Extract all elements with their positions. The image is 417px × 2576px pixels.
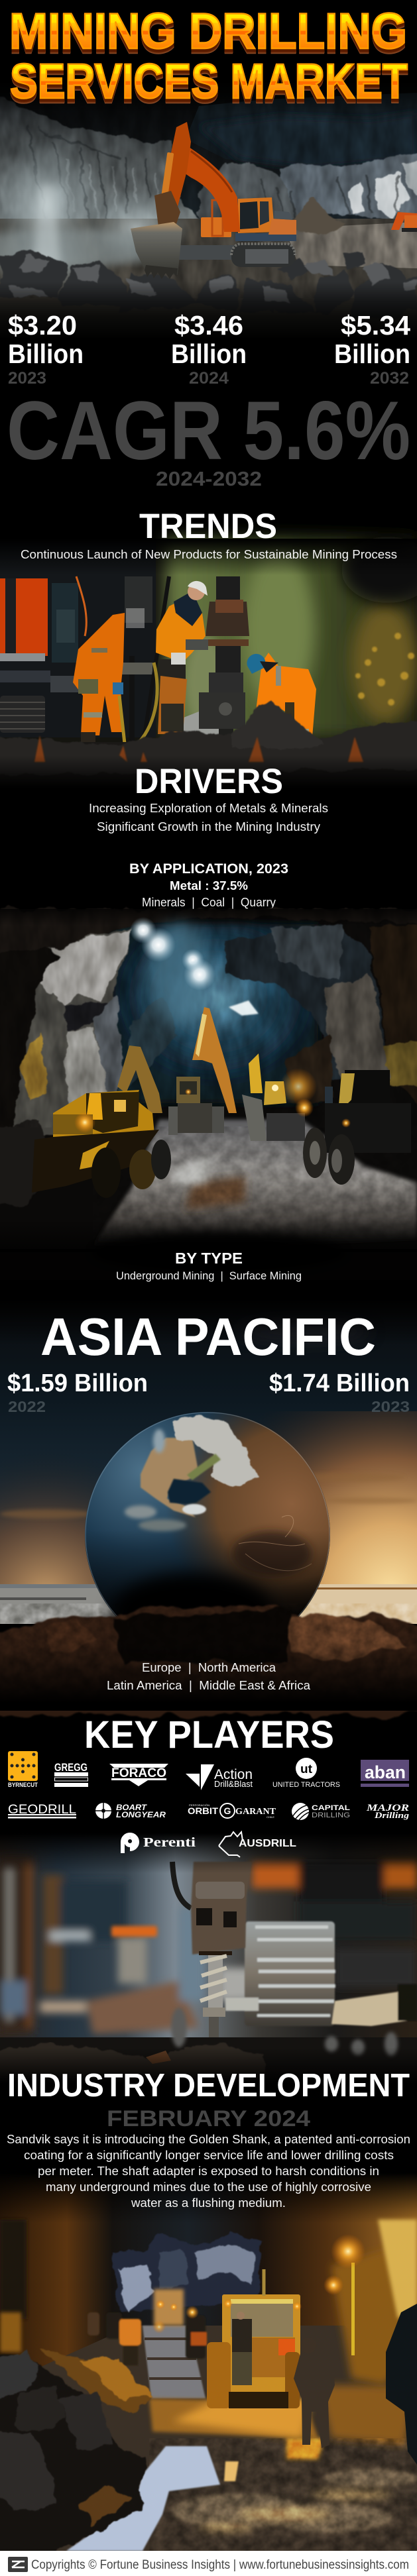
logo: Ausdrill	[219, 1832, 296, 1857]
logo: Gregg	[54, 1761, 88, 1787]
stat: 2023: $3.20	[8, 310, 77, 341]
heading: drivers: DRIVERS	[135, 762, 283, 801]
development text: Sandvik says it is introducing the Golden Shank, a patented anti-corrosion	[7, 2133, 410, 2146]
development text: coating for a significantly longer service life and lower drilling costs	[24, 2149, 394, 2162]
logo: Byrnecut	[8, 1751, 38, 1788]
floor	[93, 1120, 417, 1246]
segment: by application	[129, 861, 288, 909]
drill rig column	[119, 576, 249, 752]
development date: FEBRUARY 2024	[107, 2106, 310, 2131]
logo: Orbit Garant: ORBIT	[188, 1805, 218, 1816]
land	[141, 1438, 199, 1517]
standing worker	[294, 2337, 335, 2448]
logo: Major Drilling	[366, 1803, 410, 1820]
logo: Major Drilling: MAJOR	[366, 1803, 409, 1813]
image: underground mine tunnel	[0, 909, 417, 1280]
icon: Fortune Business Insights logo	[8, 2557, 28, 2572]
stat: 2032: Billion	[334, 339, 410, 369]
logo: United Tractors: ut	[300, 1762, 312, 1776]
ground	[0, 2326, 417, 2551]
other regions	[107, 1661, 311, 1692]
heading: trends: TRENDS	[139, 507, 277, 546]
background excavators	[117, 1007, 317, 1141]
stat: 2032: $5.34	[341, 310, 410, 341]
stat: 2024: Billion	[171, 339, 247, 369]
dark loader	[303, 1070, 411, 1185]
segment: by application: Minerals | Coal | Quarry	[142, 896, 276, 909]
development text	[7, 2133, 410, 2210]
CAGR period: 2024-2032	[156, 467, 262, 490]
foreground worker	[386, 2304, 417, 2465]
logo: Capital Drilling: CAPITAL	[312, 1804, 350, 1812]
logo: Aban: aban	[365, 1762, 406, 1782]
stat: 2032: 2032	[370, 369, 409, 388]
logo: Perenti: Perenti	[143, 1835, 196, 1850]
dirt mound	[0, 1603, 417, 1716]
logo: Ausdrill: AUSDRILL	[239, 1838, 296, 1849]
segment: by type: BY TYPE	[175, 1250, 243, 1267]
worker left	[73, 608, 145, 755]
image: globe at sunset	[0, 1299, 417, 1716]
logo: Boart Longyear	[95, 1803, 166, 1819]
people in distance	[88, 2312, 207, 2365]
logo: Capital Drilling	[292, 1803, 350, 1820]
logo: Gregg: GREGG	[54, 1761, 88, 1774]
yellow loader	[32, 1090, 171, 1198]
logo: Orbit Garant: CHILE	[267, 1815, 274, 1819]
logo: Boart Longyear: BOART	[116, 1803, 148, 1812]
cave walls	[0, 909, 417, 1206]
logo: Perenti	[123, 1835, 196, 1853]
other regions: Europe | North America	[142, 1661, 276, 1674]
heading: industry development: INDUSTRY DEVELOPMENT	[7, 2068, 410, 2104]
stat: 2023: 2023	[8, 369, 46, 388]
logo: Boart Longyear: LONGYEAR	[116, 1810, 166, 1819]
worker centre	[156, 581, 208, 734]
regional value 2022: 2022	[8, 1398, 46, 1415]
segment: by type	[116, 1250, 302, 1282]
machine panel	[0, 576, 229, 737]
logo: Orbit Garant	[188, 1803, 276, 1819]
segment: by application: Metal : 37.5%	[170, 879, 248, 892]
water stream	[66, 2446, 220, 2551]
logo: United Tractors	[272, 1758, 340, 1789]
logo: Major Drilling: Drilling	[374, 1810, 410, 1820]
footer bar	[0, 2551, 417, 2576]
stat: 2023: Billion	[8, 339, 84, 369]
regional value 2022	[7, 1369, 148, 1415]
small excavator	[391, 212, 417, 232]
drivers text: Increasing Exploration of Metals & Minerals	[89, 802, 328, 815]
image: excavator at open-pit mine	[0, 73, 417, 351]
stat: 2024	[171, 310, 247, 388]
distant snowy rock	[113, 2233, 262, 2312]
yellow loader	[207, 2269, 302, 2408]
logo: Foraco	[109, 1764, 168, 1786]
development text: many underground mines due to the use of highly corrosive	[46, 2180, 371, 2194]
logo: Byrnecut: BYRNECUT	[8, 1782, 38, 1788]
image: drilling crew	[0, 537, 417, 788]
drivers text: Significant Growth in the Mining Industry	[97, 820, 320, 833]
title	[9, 3, 408, 109]
globe	[85, 1412, 330, 1657]
trends text: Continuous Launch of New Products for Sustainable Mining Process	[21, 548, 397, 561]
crawler track	[225, 1921, 335, 2026]
logo: United Tractors: UNITED TRACTORS	[272, 1781, 340, 1789]
image: auger drill close-up	[0, 1833, 417, 2084]
image: mine road with loader	[0, 2173, 417, 2557]
logo: Orbit Garant: G	[224, 1805, 231, 1816]
development text: water as a flushing medium.	[131, 2196, 286, 2210]
regional value 2023: 2023	[371, 1398, 410, 1415]
left rock pile	[0, 2349, 152, 2557]
development text: per meter. The shaft adapter is exposed to harsh conditions in	[38, 2165, 379, 2178]
lights	[149, 921, 209, 1027]
heading: key players: KEY PLAYERS	[84, 1713, 334, 1756]
logo: Action Drill & Blast	[186, 1764, 253, 1790]
other regions: Latin America | Middle East & Africa	[107, 1679, 311, 1692]
regional value 2022: $1.59 Billion	[7, 1369, 148, 1397]
stat: 2023	[8, 310, 84, 388]
market size statistics	[8, 310, 410, 388]
logo: Foraco: FORACO	[111, 1766, 166, 1780]
logo: Orbit Garant: GARANT	[235, 1807, 276, 1817]
regional value 2023: $1.74 Billion	[269, 1369, 410, 1397]
logo: Action Drill & Blast: Action	[214, 1767, 253, 1782]
segment: by application: BY APPLICATION, 2023	[129, 861, 288, 877]
logo: Action Drill & Blast: Drill&Blast	[214, 1779, 253, 1789]
gloved hand	[331, 1984, 417, 2026]
logo: Aban	[361, 1760, 409, 1787]
drill head and auger	[172, 1862, 252, 2043]
logo: Capital Drilling: DRILLING	[312, 1811, 350, 1819]
stat: 2032	[334, 310, 410, 388]
stat: 2024: 2024	[189, 369, 229, 388]
excavator	[131, 122, 296, 279]
stat: 2024: $3.46	[174, 310, 243, 341]
heading: asia pacific: ASIA PACIFIC	[40, 1307, 376, 1366]
worker right	[247, 653, 316, 749]
logo: Geodrill: GEODRILL	[8, 1803, 76, 1817]
segment: by type: Underground Mining | Surface Mining	[116, 1269, 302, 1282]
drivers text	[89, 802, 328, 833]
logo: Orbit Garant: PERFORACIÓN	[189, 1803, 209, 1807]
tunnel wall glow	[324, 2220, 417, 2385]
key player logos	[8, 1751, 410, 1857]
regional value 2023	[269, 1369, 410, 1415]
